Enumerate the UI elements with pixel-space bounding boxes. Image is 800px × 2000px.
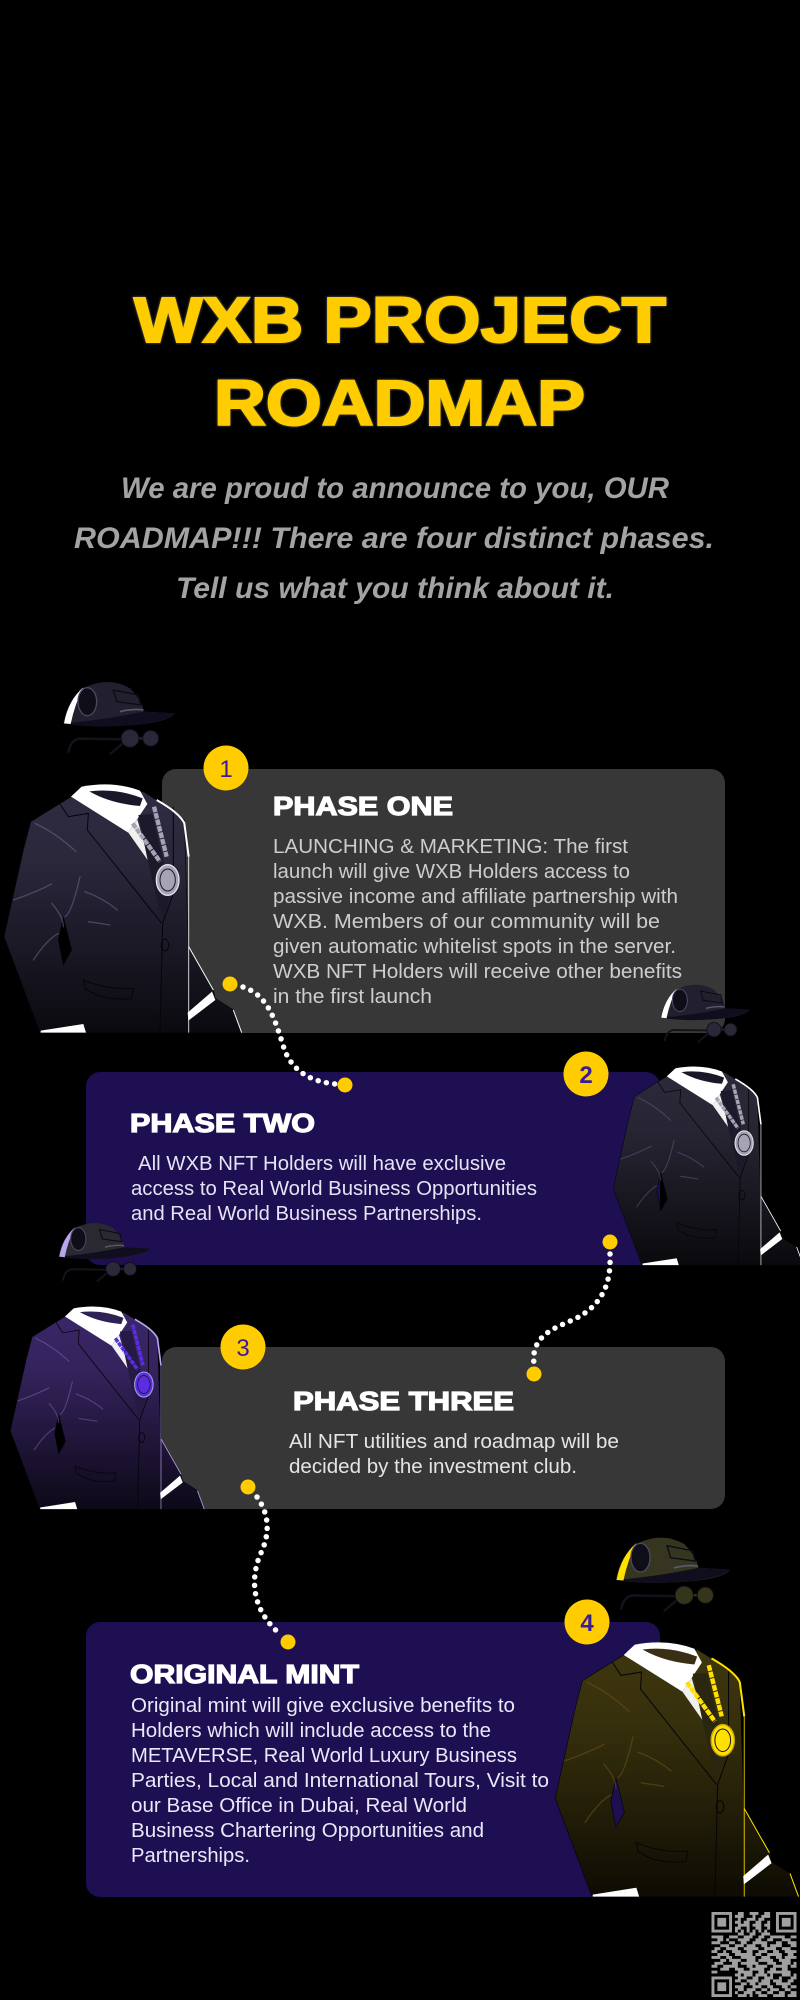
text: phase one description: launch will give WXB Holders access to <box>273 861 630 883</box>
text: phase one description: LAUNCHING & MARKETING: The first <box>273 836 628 858</box>
heading: original mint: ORIGINAL MINT <box>130 1659 359 1689</box>
badge: number 4: 4 <box>580 1610 594 1637</box>
intro text: We are proud to announce to you, OUR <box>121 472 669 505</box>
intro text: ROADMAP!!! There are four distinct phases. <box>74 522 714 555</box>
icon: suit character four <box>555 1538 799 1897</box>
badge: number 1 <box>204 746 248 790</box>
text: original mint description: Partnerships. <box>131 1845 250 1867</box>
text: phase one description: WXB NFT Holders will receive other benefits <box>273 961 682 983</box>
icon: suit character one <box>4 682 242 1033</box>
text: original mint description: our Base Office in Dubai, Real World <box>131 1795 467 1817</box>
badge: number 2 <box>564 1052 608 1096</box>
title: ROADMAP <box>214 367 585 439</box>
badge: number 3: 3 <box>236 1335 250 1362</box>
text: phase one description: given automatic whitelist spots in the server. <box>273 936 676 958</box>
icon: QR code <box>712 1912 796 1997</box>
icon: suit character two <box>613 985 800 1265</box>
text: phase one description: in the first launch <box>273 986 432 1008</box>
text: phase two description: access to Real World Business Opportunities <box>131 1178 537 1200</box>
panel: original mint <box>86 1622 660 1897</box>
text: original mint description: Business Chartering Opportunities and <box>131 1820 484 1842</box>
arrow: dotted connector phase two to three <box>526 1234 618 1382</box>
badge: number 2: 2 <box>579 1062 593 1089</box>
text: original mint description: Holders which will include access to the <box>131 1720 491 1742</box>
badge: number 1: 1 <box>219 756 233 783</box>
title: WXB PROJECT <box>134 284 666 356</box>
panel: phase three <box>162 1347 725 1509</box>
icon: suit character three <box>10 1223 204 1509</box>
text: phase three description: All NFT utilities and roadmap will be <box>289 1431 619 1453</box>
intro text: Tell us what you think about it. <box>176 572 614 605</box>
panel: phase two <box>86 1072 660 1265</box>
text: original mint description: Parties, Local and International Tours, Visit to <box>131 1770 549 1792</box>
arrow: dotted connector phase one to two <box>222 976 352 1092</box>
text: phase one description <box>273 836 682 1008</box>
text: phase three description: decided by the investment club. <box>289 1456 577 1478</box>
badge: number 4 <box>564 1600 610 1644</box>
text: original mint description <box>131 1695 549 1867</box>
text: phase one description: passive income and affiliate partnership with <box>273 886 678 908</box>
heading: phase one: PHASE ONE <box>273 791 453 821</box>
intro text <box>74 472 714 605</box>
title <box>134 284 666 439</box>
text: phase two description <box>131 1153 537 1225</box>
arrow: dotted connector phase three to four <box>240 1480 296 1650</box>
text: original mint description: METAVERSE, Real World Luxury Business <box>131 1745 517 1767</box>
badge: number 3 <box>220 1324 266 1370</box>
text: phase three description <box>289 1431 619 1478</box>
panel: phase one <box>162 769 725 1033</box>
heading: phase two: PHASE TWO <box>130 1108 315 1138</box>
text: phase two description: and Real World Business Partnerships. <box>131 1203 482 1225</box>
text: phase one description: WXB. Members of our community will be <box>273 911 660 933</box>
text: phase two description: All WXB NFT Holders will have exclusive <box>138 1153 506 1175</box>
heading: phase three: PHASE THREE <box>293 1386 514 1416</box>
text: original mint description: Original mint will give exclusive benefits to <box>131 1695 515 1717</box>
